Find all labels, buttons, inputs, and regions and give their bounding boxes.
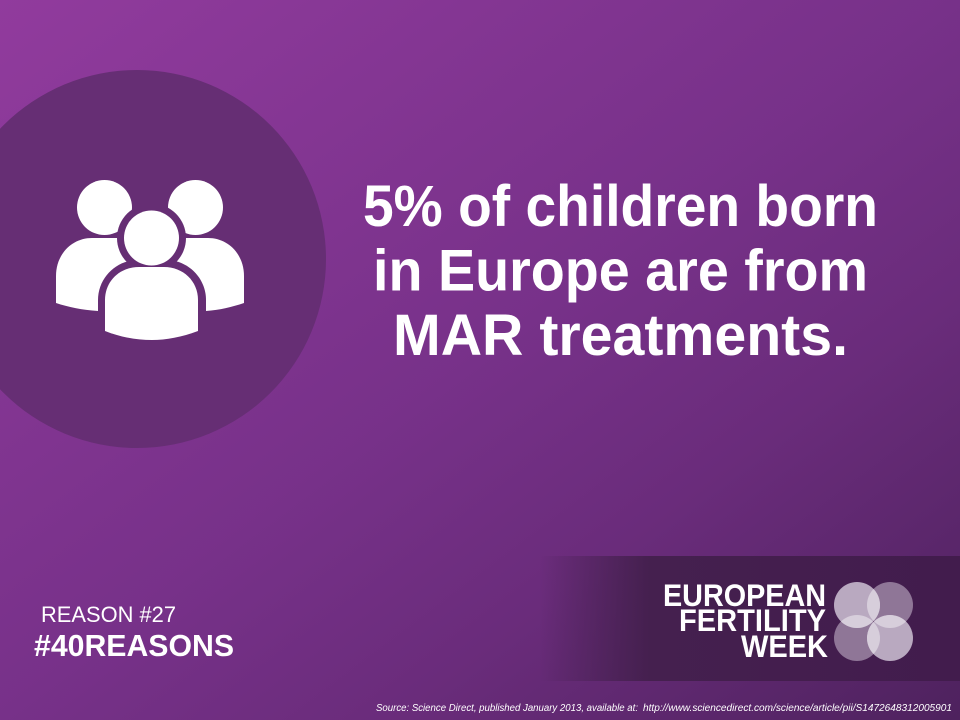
- source citation: http://www.sciencedirect.com/science/article/pii/S1472648312005901: [643, 703, 952, 714]
- logo text: WEEK: [741, 628, 829, 664]
- headline: MAR treatments.: [393, 303, 848, 368]
- headline: [363, 174, 878, 368]
- headline: 5% of children born: [363, 174, 878, 239]
- logo text: [663, 577, 829, 664]
- logo text: FERTILITY: [679, 602, 826, 638]
- panel: logo band: [540, 556, 960, 681]
- hashtag: #40REASONS: [34, 628, 234, 663]
- reason number: REASON #27: [41, 602, 176, 627]
- source citation: [376, 703, 952, 714]
- panel: icon circle: [0, 70, 326, 448]
- headline: in Europe are from: [373, 238, 868, 304]
- logo circles: [834, 582, 913, 661]
- logo text: EUROPEAN: [663, 577, 826, 613]
- icon: three people: [56, 180, 244, 340]
- source citation: Source: Science Direct, published January 2013, available at:: [376, 703, 638, 714]
